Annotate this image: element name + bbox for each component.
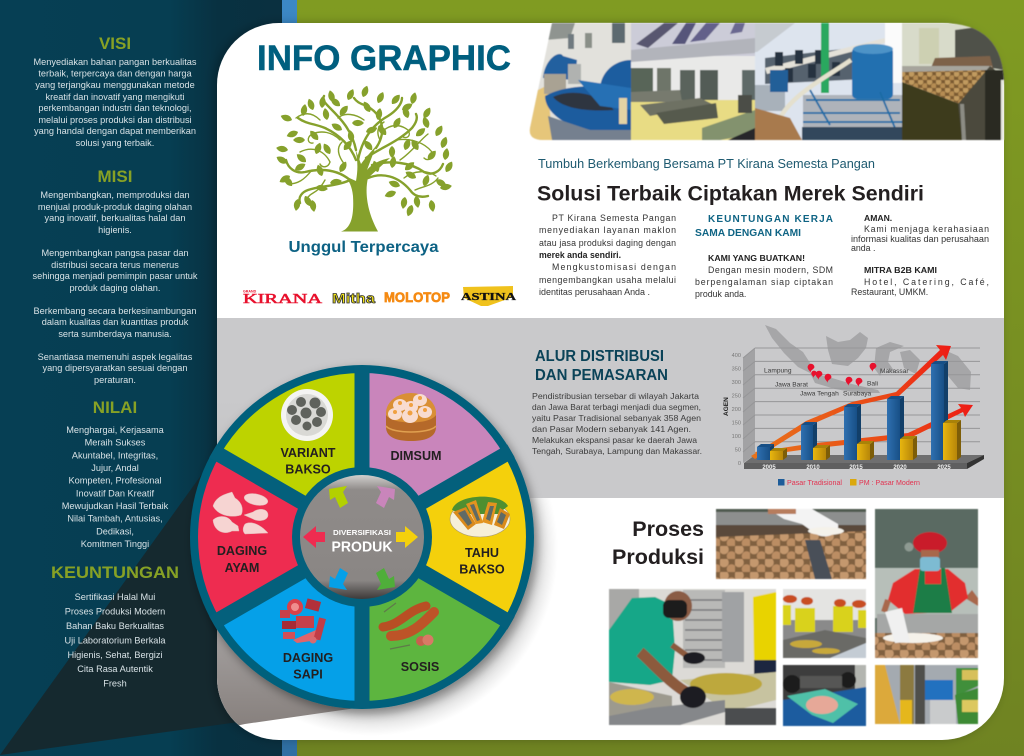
text: visi body: terbaik, terpercaya dan dengan harga [38, 68, 193, 78]
text: misi body: Senantiasa memenuhi aspek legalitas [38, 352, 193, 362]
heading: proses produksi: Produksi [612, 545, 704, 569]
text: misi body: peraturan. [94, 375, 136, 385]
segment: sosis [362, 537, 504, 701]
chart walls and floor [743, 348, 984, 469]
icon: tree logo [275, 85, 455, 231]
segment: tahu bakso [362, 455, 526, 619]
text: misi body [33, 190, 198, 385]
text: visi body [34, 57, 197, 148]
y axis labels: 350 [732, 366, 741, 372]
text: visi body: kreatif dan inovatif yang mengikuti [46, 92, 184, 102]
segment labels: DAGING [217, 544, 267, 558]
text column 3: aman and mitra [851, 213, 989, 297]
heading: keuntungan kerja sama: KEUNTUNGAN KERJA [708, 214, 833, 225]
map labels: Jawa Tengah [800, 390, 839, 398]
text column 1: intro: PT Kirana Semesta Pangan [552, 213, 676, 223]
photo: worker in green with trays [609, 589, 776, 725]
text: visi body: yang terjangkau menggunakan metode [35, 80, 195, 90]
text column 3: aman and mitra: Hotel, Catering, Café, [864, 277, 989, 287]
segment labels: SOSIS [401, 660, 439, 674]
brand logos row [243, 286, 516, 307]
wheel hub ring [292, 467, 432, 607]
text: distribusi paragraph: dan Jawa Barat terbagi menjadi dua segmen, [532, 402, 701, 412]
text: nilai body: Akuntabel, Integritas, [72, 450, 158, 460]
y axis labels [732, 353, 741, 467]
text: distribusi paragraph: yaitu Pasar Tradisional sebanyak 358 Agen [532, 413, 701, 423]
segment labels: VARIANT [280, 446, 336, 460]
text: visi body: yang handal dengan dapat memberikan [34, 126, 196, 136]
map pins [808, 363, 876, 387]
photo gallery: production process [609, 509, 978, 726]
logo: Astina [461, 286, 516, 306]
wheel: product diversification [190, 365, 534, 709]
panel: main white card [217, 23, 1004, 740]
y axis labels: 400 [732, 353, 741, 359]
wheel hub [300, 475, 424, 599]
photo: meatball tray [902, 23, 1004, 140]
photo: meatball line [716, 509, 866, 579]
y axis labels: 100 [732, 434, 741, 440]
heading: alur distribusi: ALUR DISTRIBUSI [535, 348, 664, 365]
logo: Mitha: Mitha [332, 290, 375, 306]
text: keuntungan body: Cita Rasa Autentik [77, 664, 153, 674]
x axis labels: 2020 [893, 465, 907, 471]
text: keuntungan body: Higienis, Sehat, Bergizi [68, 650, 162, 660]
hub title [332, 528, 393, 556]
chart legend [778, 479, 920, 487]
logo: Molotop: MOLOTOP [384, 289, 450, 305]
text: nilai body: Dedikasi, [96, 526, 134, 536]
text: visi body: perkembangan industri dan teknologi, [38, 103, 192, 113]
x axis labels: 2010 [806, 465, 820, 471]
photo: packaged goods [875, 665, 978, 724]
text column 1: intro: atau jasa produksi daging dengan [539, 238, 676, 248]
logo: Grand Kirana [243, 290, 323, 307]
text column 3: aman and mitra: Kami menjaga kerahasiaan [864, 224, 989, 234]
segment labels: BAKSO [285, 462, 331, 476]
text: nilai body: Meraih Sukses [85, 438, 146, 448]
heading: proses produksi: Proses [632, 517, 704, 541]
map labels: Bali [867, 380, 879, 388]
heading: VISI: VISI [99, 34, 131, 53]
text: distribusi paragraph: dan Pasar Modern sebanyak 141 Agen. [532, 424, 691, 434]
hub title: DIVERSIFIKASI [333, 528, 391, 537]
panel: grey distribution band [186, 318, 1004, 736]
photo: worker in red [875, 509, 978, 658]
text column 3: aman and mitra: informasi kualitas dan perusahaan [851, 234, 989, 244]
text: distribusi paragraph: Pendistribusian tersebar di wilayah Jakarta [532, 391, 699, 401]
segment labels: TAHU [465, 546, 499, 560]
segment: dimsum [362, 373, 504, 537]
hub arrows [303, 486, 418, 590]
text: keuntungan body: Proses Produksi Modern [65, 606, 165, 616]
y axis labels: 300 [732, 380, 741, 386]
chart legend: Pasar Tradisional [787, 480, 842, 487]
chart: distribution bars over Indonesia map [723, 325, 984, 487]
text: misi body: yang inovatif, berkualitas halal dan [45, 213, 185, 223]
text: visi body: solusi yang terbaik. [76, 138, 154, 148]
subheading: Tumbuh Berkembang Bersama PT Kirana Semesta Pangan [538, 156, 875, 171]
wheel spokes [213, 366, 511, 708]
text: misi body: yang dipersyaratkan sesuai dengan [42, 363, 188, 373]
text column 2: keuntungan kerja: KAMI YANG BUATKAN! [708, 253, 805, 263]
text column 3: aman and mitra: anda . [851, 243, 875, 253]
map labels: Surabaya [843, 390, 872, 398]
photo: blue mixers [528, 23, 632, 140]
text: nilai body: Komitmen Tinggi [81, 539, 149, 549]
text column 1: intro: menyediakan layanan maklon [539, 225, 676, 235]
heading: alur distribusi [535, 348, 668, 384]
text: misi body: higienis. [98, 225, 132, 235]
text: misi body: sehingga menjadi pemimpin pasar untuk [33, 271, 198, 281]
axis title: AGEN [723, 397, 730, 416]
text: keuntungan body: Sertifikasi Halal Mui [75, 592, 155, 602]
text: nilai body: Jujur, Andal [91, 463, 139, 473]
text column 3: aman and mitra: MITRA B2B KAMI [864, 265, 937, 275]
logo: Astina: ASTINA [461, 291, 516, 303]
segment labels [217, 446, 505, 682]
segment labels: BAKSO [459, 562, 505, 576]
photo strip: factory images [528, 23, 1004, 140]
segment: variant bakso [220, 373, 362, 537]
heading: keuntungan kerja sama [695, 214, 833, 239]
icon: tahu bakso plate [450, 497, 510, 537]
heading: alur distribusi: DAN PEMASARAN [535, 367, 668, 384]
icon: beef cuts [280, 598, 326, 644]
bars [757, 361, 961, 460]
tagline: Unggul Terpercaya [288, 239, 439, 256]
segment labels: DIMSUM [390, 449, 442, 463]
segment: daging ayam [198, 455, 362, 619]
text column 3: aman and mitra: AMAN. [864, 213, 892, 223]
lower growth arrow [755, 404, 973, 456]
x axis labels: 2015 [849, 465, 863, 471]
text: nilai body: Mewujudkan Hasil Terbaik [62, 501, 169, 511]
text: misi body: Berkembang secara berkesinambungan [34, 306, 196, 316]
text column 1: intro: Mengkustomisasi dengan [552, 262, 676, 272]
text column 2: keuntungan kerja: produk anda. [695, 289, 746, 299]
hub title: PRODUK [332, 538, 393, 556]
map: Indonesia silhouette [765, 325, 971, 393]
x axis labels: 2025 [937, 465, 951, 471]
y axis labels: 0 [738, 461, 741, 467]
heading: keuntungan kerja sama: SAMA DENGAN KAMI [695, 228, 801, 239]
text: keuntungan body: Uji Laboratorium Berkala [64, 635, 166, 645]
y axis labels: 250 [732, 394, 741, 400]
heading: proses produksi [612, 517, 704, 569]
map labels: Makassar [880, 368, 909, 375]
text column 1: intro: identitas perusahaan Anda . [539, 287, 650, 297]
text: misi body: produk daging olahan. [70, 283, 160, 293]
text: misi body: Mengembangkan, memproduksi dan [40, 190, 190, 200]
text: distribusi paragraph: Tengah, Surabaya, Lampung dan Makassar. [532, 446, 702, 456]
text: misi body: Mengembangkan pangsa pasar dan [41, 248, 189, 258]
text: distribusi paragraph: Melakukan ekspansi pasar ke daerah Jawa [532, 435, 697, 445]
text column 2: keuntungan kerja: Dengan mesin modern, SDM [708, 265, 833, 275]
segment labels: SAPI [293, 668, 323, 682]
photo: production hall [631, 23, 755, 140]
text: misi body: dalam kualitas dan kuantitas produk [42, 317, 189, 327]
text: nilai body: Menghargai, Kerjasama [66, 425, 165, 435]
background: blue strip [282, 0, 297, 756]
text: distribusi paragraph [532, 391, 702, 456]
chart legend: PM : Pasar Modern [859, 480, 920, 487]
heading: NILAI: NILAI [93, 398, 137, 417]
heading: KEUNTUNGAN: KEUNTUNGAN [51, 563, 179, 582]
icon: sausages [383, 603, 434, 649]
segment labels: AYAM [225, 561, 259, 575]
text: misi body: serta sumberdaya manusia. [58, 329, 172, 339]
text: visi body: Menyediakan bahan pangan berkualitas [34, 57, 197, 67]
text column 1: intro [539, 213, 676, 297]
text: nilai body [62, 425, 169, 549]
icon: chicken parts [213, 492, 269, 534]
upper growth arrow [751, 345, 951, 459]
text column 1: intro: mengembangkan usaha melalui [539, 275, 676, 285]
text: nilai body: Kompeten, Profesional [69, 476, 161, 486]
text column 2: keuntungan kerja [695, 214, 833, 299]
photo: packaging machine [783, 665, 866, 726]
heading: MISI: MISI [98, 167, 132, 186]
text: visi body: melalui proses produksi dan distribusi [38, 115, 192, 125]
y axis labels: 200 [732, 407, 741, 413]
text: misi body: distribusi secara terus menerus [51, 260, 179, 270]
main heading: Solusi Terbaik Ciptakan Merek Sendiri [537, 182, 924, 206]
text: keuntungan body [64, 592, 166, 688]
title: INFO GRAPHIC [257, 39, 511, 78]
y axis labels: 150 [732, 420, 741, 426]
icon: bakso bowl [281, 389, 333, 441]
background: dark teal left column [0, 0, 282, 756]
segment: daging sapi [220, 537, 362, 701]
y axis labels: 50 [735, 448, 741, 454]
icon: dimsum steamer [386, 393, 436, 441]
photo: blue motors [755, 23, 902, 140]
logo: Grand Kirana: KIRANA [243, 292, 323, 307]
photo: team in yellow [783, 589, 866, 658]
text: keuntungan body: Bahan Baku Berkualitas [66, 621, 164, 631]
text: misi body: menjual produk-produk daging olahan [38, 202, 192, 212]
dark diagonal shadow on left column [0, 455, 282, 755]
map labels: Lampung [764, 368, 792, 374]
background: green field [297, 0, 1024, 756]
text column 2: keuntungan kerja: berpengalaman siap ciptakan [695, 277, 833, 287]
text: nilai body: Nilai Tambah, Antusias, [67, 514, 163, 524]
panel: left column text [33, 34, 198, 688]
text: keuntungan body: Fresh [103, 678, 127, 688]
x axis labels [762, 465, 951, 471]
text column 1: intro: merek anda sendiri. [539, 250, 621, 260]
wheel outer ring [190, 365, 534, 709]
segment labels: DAGING [283, 651, 333, 665]
x axis labels: 2005 [762, 465, 776, 471]
text: nilai body: Inovatif Dan Kreatif [76, 488, 155, 498]
logo: Grand Kirana: GRAND [243, 290, 257, 294]
map labels [764, 368, 909, 398]
text column 3: aman and mitra: Restaurant, UMKM. [851, 287, 928, 297]
map labels: Jawa Barat [775, 382, 808, 388]
